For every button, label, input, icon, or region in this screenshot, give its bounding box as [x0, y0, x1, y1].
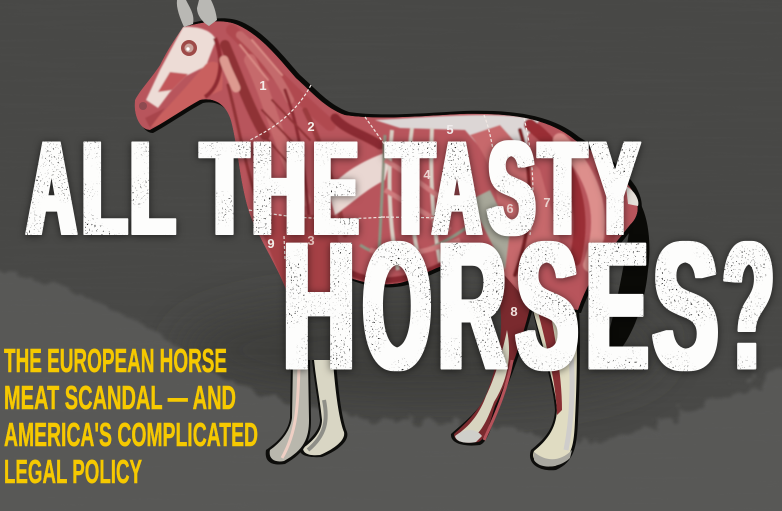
title line 1: ALL THE TASTY: A: [433, 115, 481, 263]
title line 2: HORSES?: H: [283, 206, 355, 407]
title line 2: HORSES?: E: [586, 206, 648, 407]
shadow of body: [138, 18, 642, 313]
title line 2: HORSES?: S: [516, 206, 578, 407]
illustration: anatomical horse: [135, 0, 649, 470]
title line 1: ALL THE TASTY: L: [82, 115, 127, 263]
title line 2: HORSES?: [283, 206, 774, 407]
flank: [470, 125, 560, 290]
muscle number labels: 9: [267, 236, 275, 251]
ears: [177, 0, 217, 27]
rump muscles: [515, 125, 614, 275]
dashed section lines: [249, 85, 533, 260]
ribs: [390, 128, 440, 270]
muscle number labels: 6: [506, 201, 514, 216]
nostril: [139, 102, 147, 110]
eye: [181, 40, 197, 56]
muscle number labels: 3: [307, 233, 315, 248]
far hind leg: [451, 262, 535, 446]
muscle number labels: 4: [423, 167, 431, 182]
title line 1: ALL THE TASTY: Y: [591, 115, 639, 263]
title line 2: HORSES?: R: [438, 206, 506, 407]
muscle number labels: 8: [510, 304, 518, 319]
head pale patches: [145, 27, 223, 128]
front leg near: [266, 360, 311, 464]
title line 1: ALL THE TASTY: H: [252, 115, 306, 263]
title line 1: ALL THE TASTY: E: [313, 115, 358, 263]
body muscle mass: [135, 21, 638, 310]
subtitle: THE EUROPEAN HORSE: [4, 342, 227, 379]
muscle number labels: 1: [259, 78, 267, 93]
title: ALL THE TASTY HORSES?: [27, 115, 774, 407]
tail stub: [626, 186, 638, 206]
front leg far: [300, 360, 347, 457]
subtitle: AMERICA'S COMPLICATED: [4, 416, 258, 453]
tail: [606, 190, 649, 350]
title line 1: ALL THE TASTY: A: [27, 115, 76, 263]
muscle number labels: 7: [543, 195, 551, 210]
subtitle: MEAT SCANDAL — AND: [4, 379, 236, 416]
title line 1: ALL THE TASTY: T: [387, 115, 434, 263]
shoulder pale tendon: [330, 153, 389, 216]
title line 2: HORSES?: S: [653, 206, 718, 407]
back pale area: [375, 114, 540, 145]
muscle number labels: 5: [446, 122, 454, 137]
title line 1: ALL THE TASTY: T: [539, 115, 586, 263]
neck muscles: [224, 30, 380, 235]
title line 1: ALL THE TASTY: S: [488, 115, 535, 263]
title line 1: ALL THE TASTY: T: [201, 115, 248, 263]
muscle number labels: [259, 78, 551, 319]
title line 1: ALL THE TASTY: [27, 115, 639, 263]
title line 1: ALL THE TASTY: L: [130, 115, 175, 263]
muscle number labels: 2: [307, 119, 315, 134]
subtitle: LEGAL POLICY: [4, 453, 142, 490]
title line 2: HORSES?: O: [363, 206, 431, 407]
subtitle: [4, 342, 258, 490]
near hind leg: [528, 290, 580, 470]
